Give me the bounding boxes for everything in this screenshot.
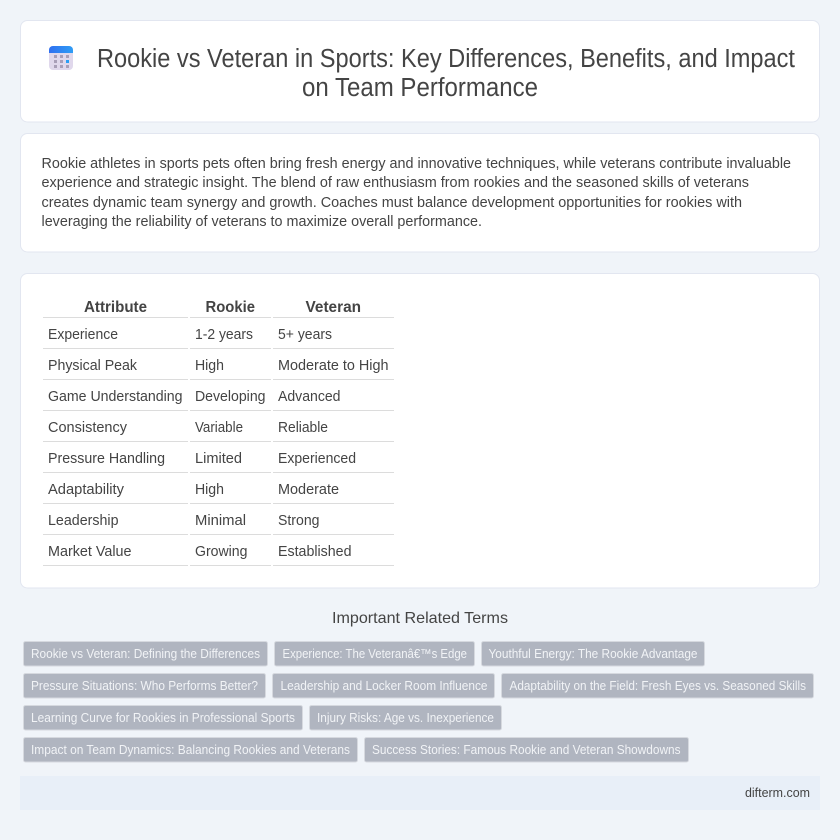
table header [84, 299, 361, 316]
text block: introduction: leveraging the reliability of veterans to maximize overall performance. [42, 214, 482, 230]
chip: Adaptability [502, 674, 814, 698]
table row: Experience [48, 327, 332, 343]
table header: Attribute [84, 299, 147, 316]
table header: Veteran [306, 299, 361, 316]
table row: Market Value: Established [278, 544, 352, 560]
table row: Pressure Handling: Pressure Handling [48, 451, 165, 467]
table row: Adaptability: Moderate [278, 482, 339, 498]
table row: Market Value [48, 544, 352, 560]
chip: Adaptability: Adaptability on the Field: Fresh Eyes vs. Seasoned Skills [510, 679, 806, 693]
chip: Pressure Situations [24, 674, 266, 698]
text block: introduction [42, 156, 791, 230]
chip: Learning Curve: Learning Curve for Rookies in Professional Sports [31, 711, 295, 725]
chip: Youthful Energy: Youthful Energy: The Rookie Advantage [488, 647, 698, 661]
table row: Game Understanding: Advanced [278, 389, 340, 405]
title: on Team Performance [302, 74, 538, 102]
related terms chips [24, 642, 814, 762]
chip: Team Dynamics: Impact on Team Dynamics: Balancing Rookies and Veterans [31, 743, 350, 757]
panel: comparison table [20, 274, 820, 588]
table row: Leadership: Strong [278, 513, 320, 529]
table row: Physical Peak: Physical Peak [48, 358, 138, 374]
chip: Experience: Experience: The Veteranâ€™s Edge [282, 647, 467, 661]
table header: Rookie [206, 299, 255, 316]
table row: Consistency [48, 420, 328, 436]
table row: Market Value: Growing [195, 544, 248, 560]
table row: Adaptability: High [195, 482, 224, 498]
heading: Important Related Terms: Important Related Terms [332, 610, 508, 627]
footer: difterm.com [745, 786, 810, 800]
chip: Leadership [272, 674, 494, 698]
panel: introduction [20, 134, 820, 252]
table row: Game Understanding: Developing [195, 389, 266, 405]
table row: Pressure Handling: Experienced [278, 451, 356, 467]
chip: Rookie vs Veteran: Rookie vs Veteran: Defining the Differences [31, 647, 260, 661]
table row: Experience: 5+ years [278, 327, 332, 343]
chip: Rookie vs Veteran [24, 642, 268, 666]
panel: header [20, 20, 820, 122]
chip: Pressure Situations: Pressure Situations: Who Performs Better? [31, 679, 258, 693]
footer [20, 776, 820, 810]
chip: Injury Risks: Injury Risks: Age vs. Inexperience [317, 711, 494, 725]
chip: Youthful Energy [482, 642, 704, 666]
table row: Physical Peak [48, 358, 388, 374]
table row: Consistency: Variable [195, 420, 243, 436]
table row: Leadership: Leadership [48, 513, 118, 529]
chip: Leadership: Leadership and Locker Room Influence [280, 679, 488, 693]
table row: Adaptability: Adaptability [48, 482, 125, 498]
table row: Pressure Handling: Limited [195, 451, 242, 467]
table row: Adaptability [48, 482, 339, 498]
table row: Leadership [48, 513, 320, 529]
table row: Game Understanding [48, 389, 340, 405]
chip: Learning Curve [24, 706, 302, 730]
title: Rookie vs Veteran in Sports: Key Differences, Benefits, and Impact [97, 45, 795, 73]
table row: Physical Peak: High [195, 358, 224, 374]
table row: Experience: Experience [48, 327, 118, 343]
table row: Pressure Handling [48, 451, 356, 467]
text block: introduction: Rookie athletes in sports pets often bring fresh energy and innovative techniques, while veterans contribute invaluable [42, 156, 791, 172]
table row: Consistency: Consistency [48, 420, 128, 436]
chip: Success Stories: Success Stories: Famous Rookie and Veteran Showdowns [372, 743, 680, 757]
icon: calendar [49, 46, 73, 70]
table row: Game Understanding: Game Understanding [48, 389, 182, 405]
chip: Injury Risks [310, 706, 502, 730]
table row: Market Value: Market Value [48, 544, 132, 560]
chip: Team Dynamics [24, 738, 358, 762]
chip: Success Stories [364, 738, 688, 762]
table row: Experience: 1-2 years [195, 327, 253, 343]
chip: Experience [274, 642, 474, 666]
table row: Consistency: Reliable [278, 420, 328, 436]
table row: Leadership: Minimal [195, 513, 246, 529]
text block: introduction: experience and strategic insight. The blend of raw enthusiasm from rookies and the seasoned skills of veterans [42, 175, 749, 191]
table row: Physical Peak: Moderate to High [278, 358, 388, 374]
text block: introduction: creates dynamic team synergy and growth. Coaches must balance development opportunities for rookies with [42, 195, 742, 211]
title [97, 45, 795, 102]
